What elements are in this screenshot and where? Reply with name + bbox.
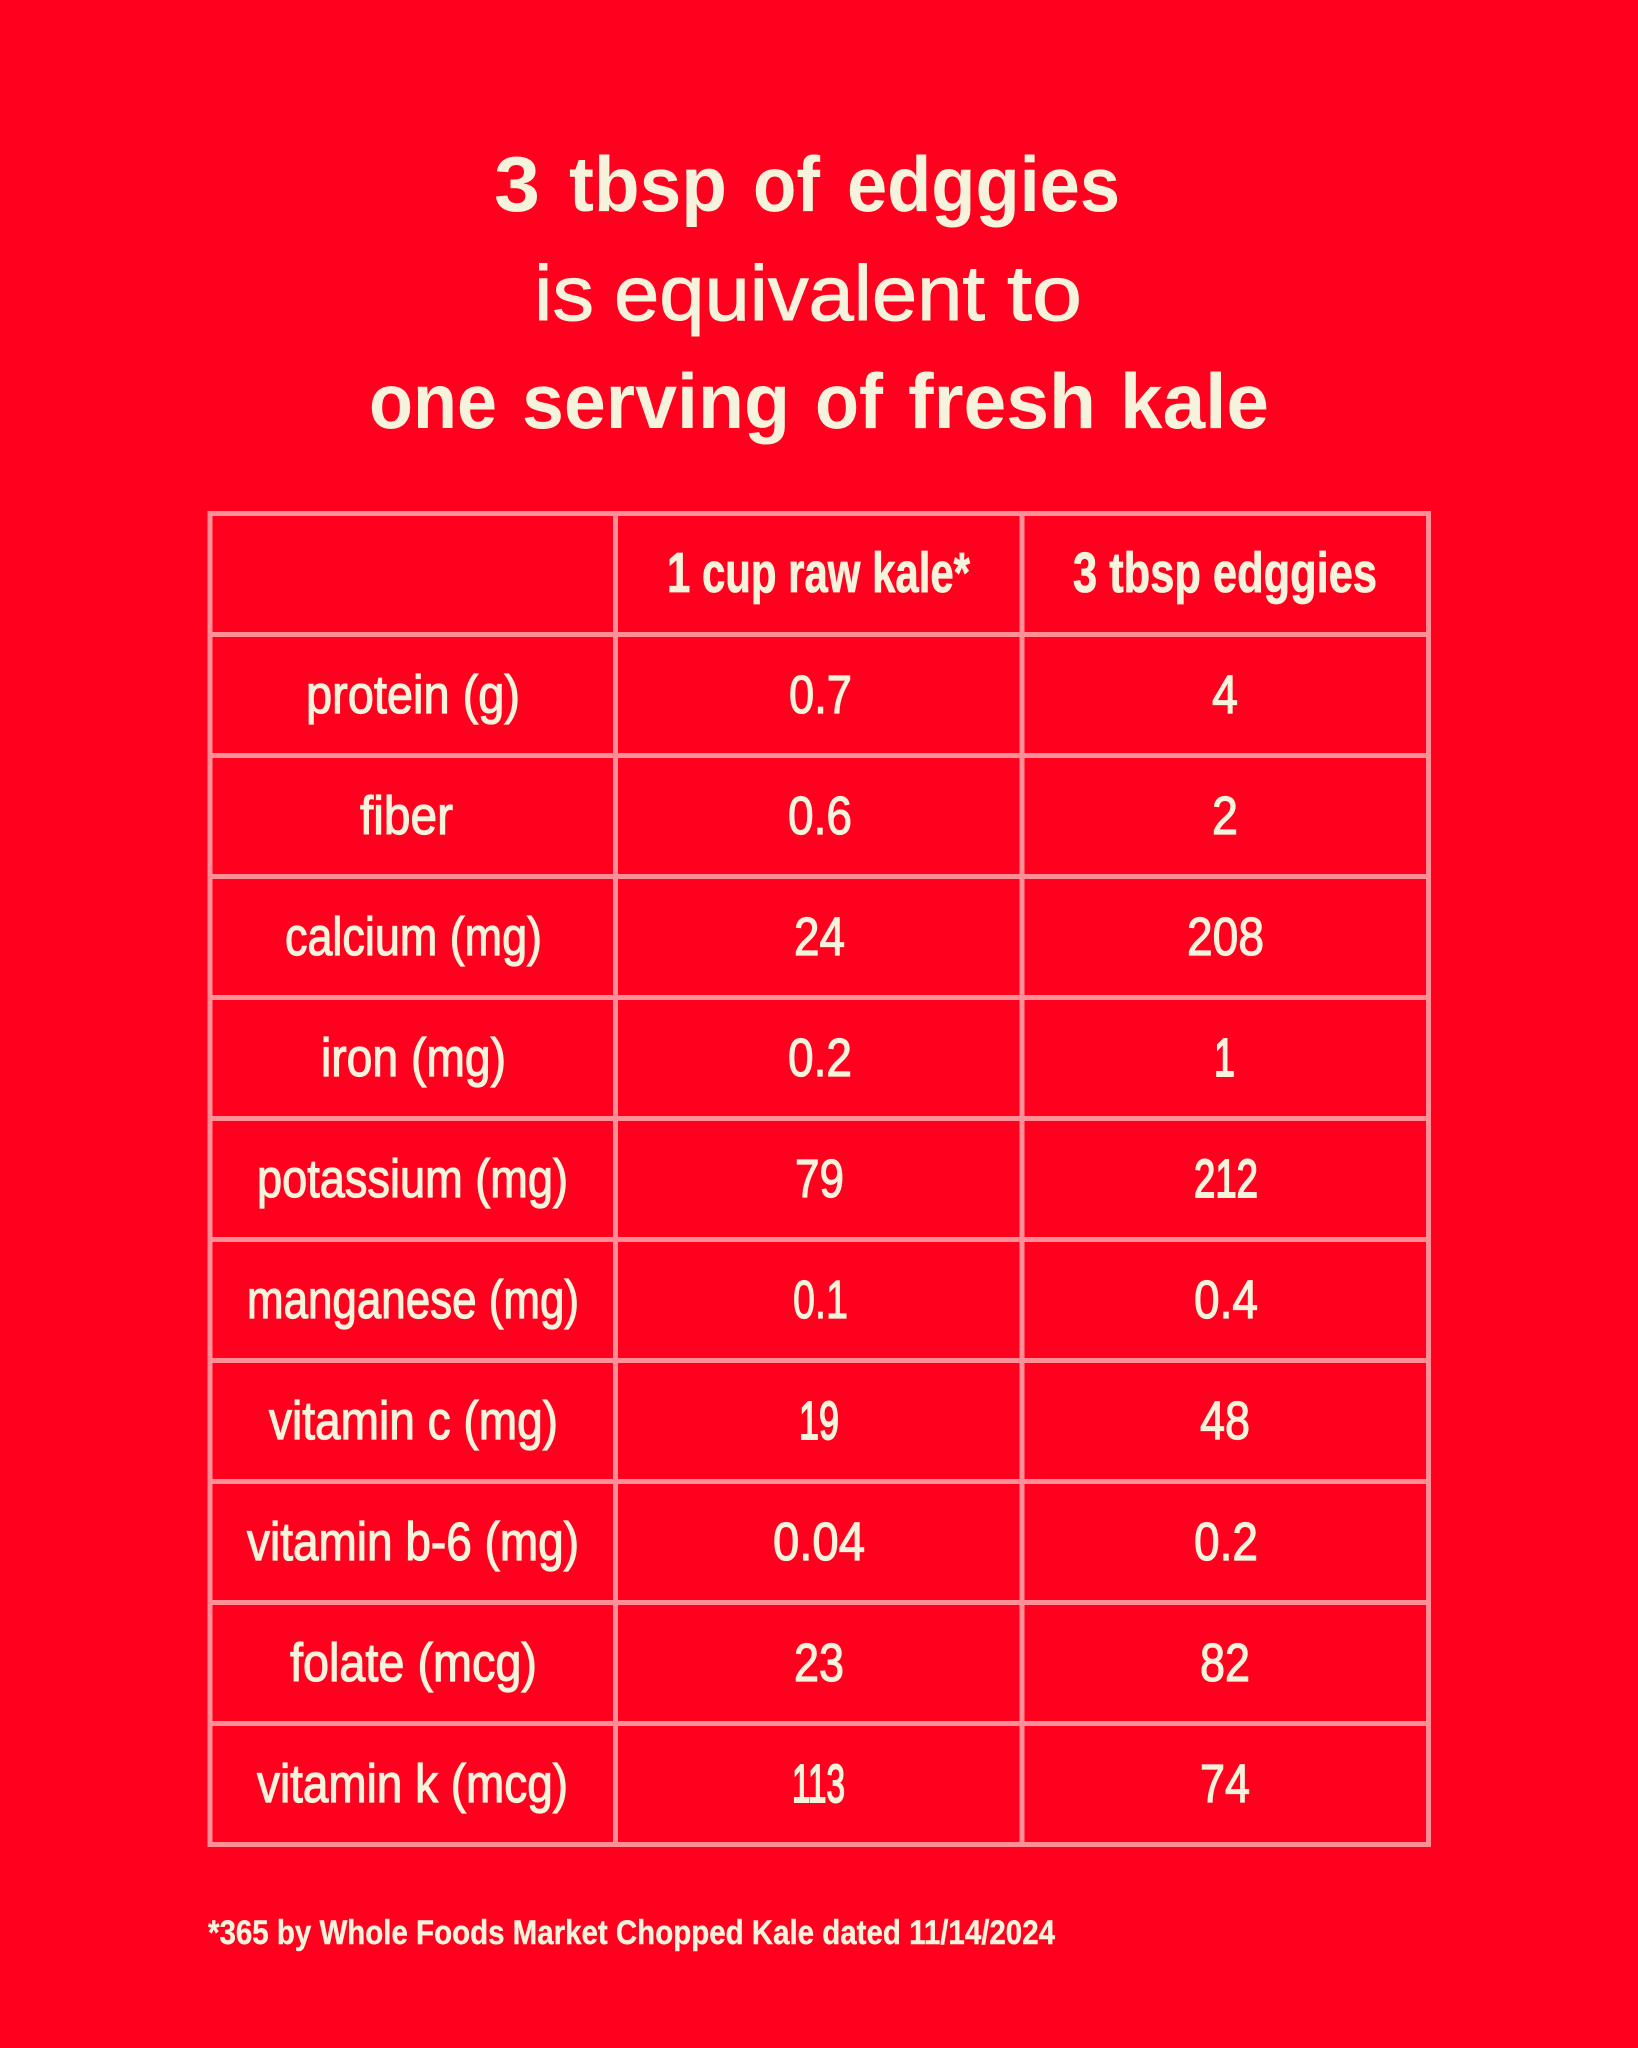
- row: vitamin b-6: vitamin b-6 (mg): [247, 1512, 579, 1572]
- title: to: [1007, 249, 1082, 337]
- table grid: [210, 514, 1428, 1844]
- row: vitamin k: 74: [1200, 1754, 1250, 1814]
- row: vitamin k: 113: [792, 1754, 845, 1814]
- row: protein: protein (g): [306, 665, 520, 725]
- row: protein: 4: [1212, 665, 1238, 725]
- row: manganese: 0.4: [1194, 1270, 1258, 1330]
- row: folate: folate (mcg): [290, 1633, 537, 1693]
- row: folate: 23: [794, 1633, 844, 1693]
- row: protein: 0.7: [789, 665, 852, 725]
- row: iron: 1: [1214, 1028, 1235, 1088]
- title: is: [534, 249, 594, 337]
- header row: [667, 541, 1377, 605]
- title: edggies: [847, 140, 1120, 228]
- row: potassium: potassium (mg): [257, 1149, 568, 1209]
- title: kale: [1120, 357, 1269, 445]
- row: potassium: 79: [795, 1149, 844, 1209]
- row: potassium: 212: [1194, 1149, 1258, 1209]
- row: vitamin c: 48: [1200, 1391, 1250, 1451]
- header row: 3 tbsp edggies: [1073, 541, 1377, 605]
- row: manganese: 0.1: [793, 1270, 848, 1330]
- row: vitamin c: [269, 1391, 1250, 1451]
- row: iron: 0.2: [788, 1028, 852, 1088]
- row: vitamin b-6: 0.04: [773, 1512, 865, 1572]
- row: vitamin k: vitamin k (mcg): [257, 1754, 568, 1814]
- header row: 1 cup raw kale*: [667, 541, 971, 605]
- row: calcium: 208: [1187, 907, 1264, 967]
- row: vitamin k: [257, 1754, 1250, 1814]
- title: 3: [494, 140, 540, 228]
- row: iron: iron (mg): [321, 1028, 506, 1088]
- row: vitamin b-6: [247, 1512, 1258, 1572]
- title: one: [369, 357, 497, 445]
- title: tbsp: [569, 140, 727, 228]
- row: calcium: calcium (mg): [285, 907, 542, 967]
- title: fresh: [908, 357, 1096, 445]
- row: protein: [306, 665, 1238, 725]
- row: vitamin c: 19: [799, 1391, 839, 1451]
- title: equivalent: [614, 249, 985, 337]
- title: [369, 140, 1269, 445]
- row: vitamin c: vitamin c (mg): [269, 1391, 558, 1451]
- title: of: [815, 357, 884, 445]
- comparison table: [210, 514, 1428, 1844]
- title: serving: [522, 357, 790, 445]
- row: fiber: 2: [1212, 786, 1238, 846]
- row: manganese: [247, 1270, 1258, 1330]
- row: iron: [321, 1028, 1235, 1088]
- row: fiber: fiber: [360, 786, 453, 846]
- row: fiber: 0.6: [788, 786, 852, 846]
- row: folate: 82: [1200, 1633, 1250, 1693]
- row: fiber: [360, 786, 1238, 846]
- footnote: *365 by Whole Foods Market Chopped Kale dated 11/14/2024: [208, 1914, 1055, 1952]
- row: folate: [290, 1633, 1250, 1693]
- row: manganese: manganese (mg): [247, 1270, 579, 1330]
- row: calcium: 24: [794, 907, 845, 967]
- row: potassium: [257, 1149, 1258, 1209]
- row: vitamin b-6: 0.2: [1194, 1512, 1258, 1572]
- title: of: [753, 140, 821, 228]
- row: calcium: [285, 907, 1264, 967]
